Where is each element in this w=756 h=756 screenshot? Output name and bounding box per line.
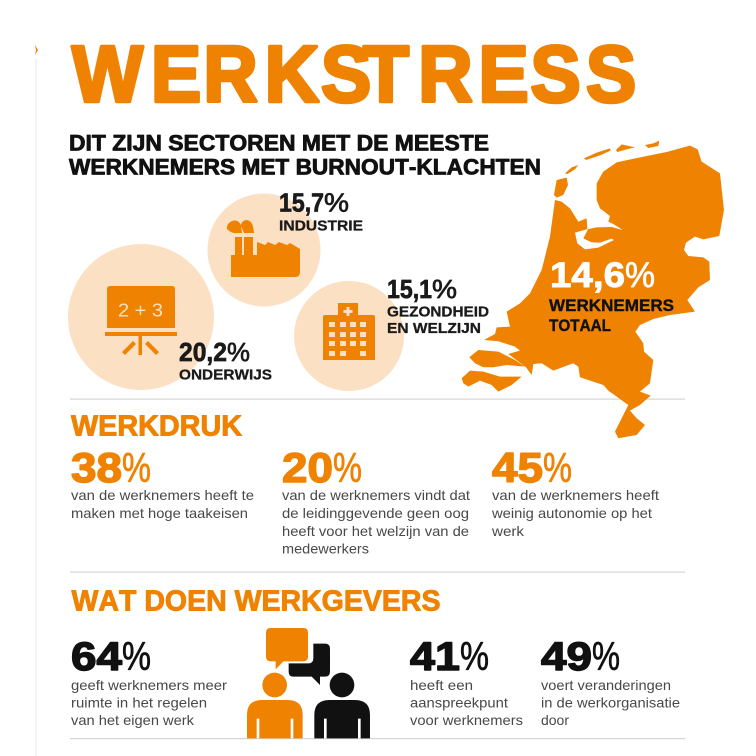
stat: 64%: geeft werknemers meer	[71, 677, 227, 693]
stat: 41%	[410, 635, 523, 728]
stat: 64%: van het eigen werk	[71, 712, 195, 728]
label: gezondheid: 15,1%	[387, 274, 457, 304]
label: gezondheid	[387, 274, 489, 337]
icon: factory	[227, 220, 300, 277]
stat: 49%: in de werkorganisatie	[541, 694, 680, 710]
label: gezondheid: GEZONDHEID	[387, 304, 489, 320]
heading: sectors: WERKNEMERS MET BURNOUT-KLACHTEN	[69, 154, 541, 180]
stat: 38%	[71, 444, 254, 521]
map: Netherlands with total	[462, 141, 724, 438]
stat: 41%: voor werknemers	[410, 712, 523, 728]
stat: 49%: door	[541, 712, 569, 728]
stat: 41%: heeft een	[410, 677, 473, 693]
stat: 20%: 20%	[282, 444, 362, 491]
stat: 45%	[491, 444, 659, 539]
map label: WERKNEMERS	[549, 296, 674, 315]
stat: 38%: 38%	[71, 444, 151, 491]
circle: industrie	[208, 194, 320, 306]
map value: 14,6%	[550, 256, 655, 295]
stat: 45%: weinig autonomie op het	[491, 505, 652, 521]
icon: hospital	[323, 303, 375, 360]
stat: 38%: maken met hoge taakeisen	[71, 505, 248, 521]
heading: wat doen werkgevers: WAT DOEN WERKGEVERS	[72, 586, 440, 618]
heading: werkdruk: WERKDRUK	[71, 411, 242, 443]
map label: TOTAAL	[549, 316, 611, 335]
stat: 20%	[282, 444, 470, 556]
icon: school board	[105, 286, 177, 355]
icon: two people talking	[247, 628, 370, 738]
label: industrie: INDUSTRIE	[279, 218, 363, 235]
circle: onderwijs	[68, 244, 214, 390]
label: onderwijs	[179, 337, 272, 383]
stat: 38%: van de werknemers heeft te	[71, 487, 254, 503]
stat: 45%: 45%	[492, 444, 572, 491]
stat: 64%: 64%	[71, 635, 151, 679]
stat: 64%	[71, 635, 227, 728]
heading: sectors	[69, 130, 541, 180]
stat: 49%: voert veranderingen	[541, 677, 671, 693]
icon: school board: 2 + 3	[118, 300, 163, 320]
stat: 41%: aanspreekpunt	[410, 694, 508, 710]
label: onderwijs: ONDERWIJS	[179, 366, 272, 383]
circle: gezondheid	[294, 281, 404, 391]
stat: 20%: heeft voor het welzijn van de	[282, 523, 469, 539]
stat: 49%: 49%	[541, 635, 620, 679]
heading: sectors: DIT ZIJN SECTOREN MET DE MEESTE	[69, 130, 489, 156]
divider lines	[70, 398, 685, 739]
stat: 20%: medewerkers	[282, 540, 369, 556]
label: onderwijs: 20,2%	[179, 337, 250, 367]
title: WERKSTRESS	[72, 30, 636, 119]
stat: 49%	[541, 635, 680, 728]
stat: 20%: van de werknemers vindt dat	[282, 487, 470, 503]
stat: 20%: de leidinggevende geen oog	[282, 505, 469, 521]
map label	[549, 296, 674, 335]
label: industrie	[279, 188, 363, 235]
stat: 45%: van de werknemers heeft	[492, 487, 659, 503]
stat: 41%: 41%	[410, 635, 489, 679]
stat: 64%: ruimte in het regelen	[71, 694, 207, 710]
label: industrie: 15,7%	[279, 188, 349, 218]
stat: 45%: werk	[491, 523, 525, 539]
label: gezondheid: EN WELZIJN	[387, 320, 481, 337]
